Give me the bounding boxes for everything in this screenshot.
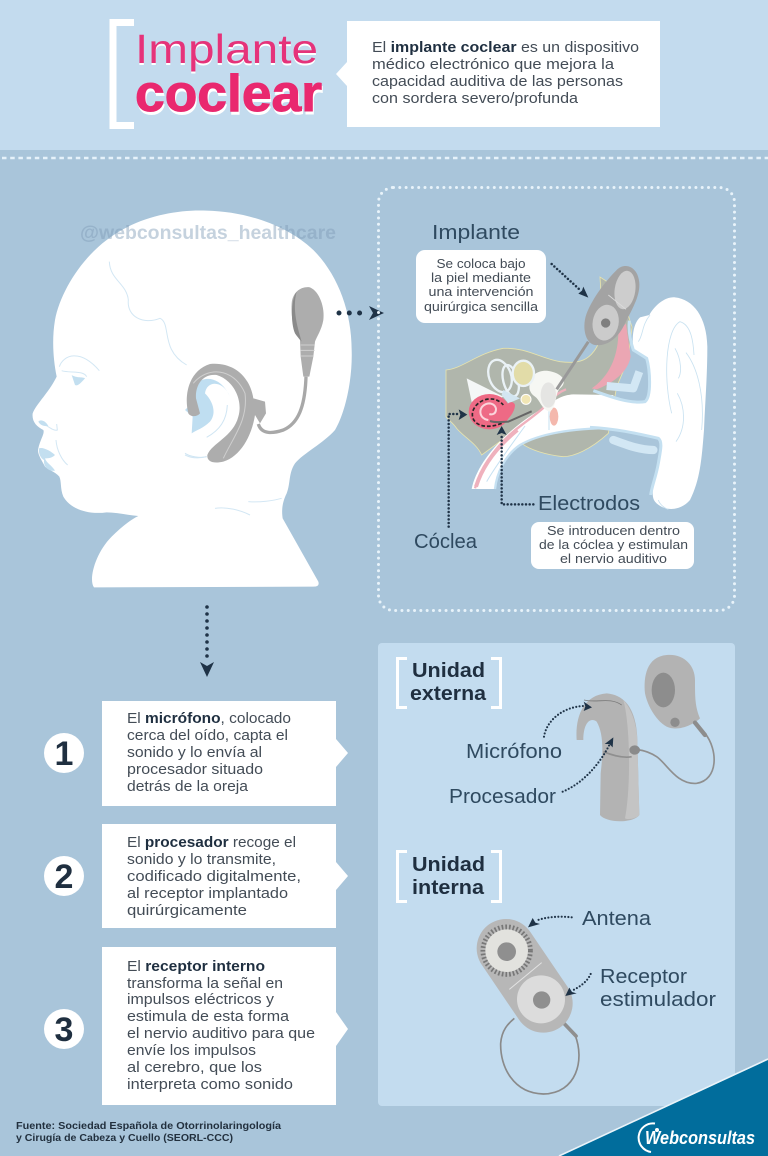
title: [113, 22, 322, 126]
step text 1: detrás de la oreja: [127, 778, 249, 795]
middle ear cloud: [529, 371, 564, 412]
step 2: [44, 824, 348, 928]
number badge 3: [44, 1009, 84, 1049]
cochlear fan: [467, 378, 503, 410]
step text 3: [102, 947, 348, 1105]
arrow: Procesador: [563, 737, 613, 792]
cable: [258, 377, 306, 433]
intro text box: médico electrónico que mejora la: [372, 56, 615, 73]
callout: implant placement: quirúrgica sencilla: [424, 300, 538, 314]
intro text box: capacidad auditiva de las personas: [372, 73, 623, 90]
label: Electrodos: Electrodos: [538, 493, 640, 515]
callout: electrodes: [531, 522, 694, 569]
implant stem: [557, 342, 588, 389]
eardrum shade: [550, 408, 558, 426]
callout: electrodes: Se introducen dentro: [547, 524, 680, 538]
step text 2: quirúrgicamente: [127, 902, 247, 919]
label: Receptor estimulador: Receptor: [600, 966, 687, 988]
arrow: Electrodos: [497, 426, 533, 504]
arrow: Antena: [528, 917, 572, 927]
step text 1: procesador situado: [127, 761, 263, 778]
intro text box: [336, 21, 660, 127]
intro text box: con sordera severo/profunda: [372, 90, 579, 107]
source note: y Cirugía de Cabeza y Cuello (SEORL-CCC): [16, 1132, 233, 1144]
step text 3: el nervio auditivo para que: [127, 1025, 315, 1042]
watermark: @webconsultas_healthcare: [80, 223, 336, 244]
brand corner: [559, 1059, 768, 1156]
coil: [645, 655, 700, 728]
implant body: [506, 948, 543, 1003]
arrow: head to implant detail: [339, 306, 384, 320]
step text 2: sonido y lo transmite,: [127, 851, 276, 868]
number badge 2: [44, 856, 84, 896]
panel: implant detail: [378, 188, 734, 610]
arrow: head down to steps: [200, 607, 214, 677]
connecting cable: [603, 733, 714, 783]
step text 3: estimula de esta forma: [127, 1008, 290, 1025]
illustration: baby head with implant: [33, 211, 352, 587]
outer ear: [557, 266, 707, 509]
label: Cóclea: Cóclea: [414, 531, 478, 553]
logo: Webconsultas: [645, 1128, 755, 1148]
middle and inner ear: [446, 277, 632, 489]
step text 1: [102, 701, 348, 806]
ear canal: [472, 394, 613, 489]
step text 3: al cerebro, que los: [127, 1059, 262, 1076]
step text 3: El receptor interno: [127, 958, 265, 975]
number badge 3: 3: [55, 1011, 73, 1049]
illustration: internal unit: [483, 927, 579, 1094]
heading: Unidad interna: interna: [412, 877, 485, 899]
antenna ring: [483, 927, 530, 974]
canal lining: [590, 321, 661, 495]
step text 2: al receptor implantado: [127, 885, 288, 902]
step 1: [44, 701, 348, 806]
source note: Fuente: Sociedad Española de Otorrinolaringología: [16, 1120, 281, 1132]
step text 1: sonido y lo envía al: [127, 744, 262, 761]
semicircular canals: [484, 357, 534, 398]
head silhouette: [33, 211, 352, 587]
ear: [185, 379, 230, 433]
coil: [292, 287, 324, 377]
arrow: Cóclea: [449, 409, 467, 527]
label: Receptor estimulador: [600, 966, 716, 1011]
auditory nerve: [475, 389, 566, 488]
callout: implant placement: una intervención: [428, 285, 534, 299]
callout: implant placement: la piel mediante: [431, 271, 531, 285]
number badge 2: 2: [55, 858, 73, 896]
callout: implant placement: [416, 250, 546, 323]
illustration: inner ear anatomy: [446, 266, 707, 509]
title bracket: [113, 22, 134, 126]
auricle folds: [638, 315, 702, 509]
number badge 1: [44, 733, 84, 773]
number badge 1: 1: [55, 735, 73, 773]
step text 1: cerca del oído, capta el: [127, 727, 288, 744]
processor: [187, 364, 266, 463]
panel: device units: [378, 643, 735, 1106]
step text 2: El procesador recoge el: [127, 834, 296, 851]
muscle: [592, 323, 631, 389]
callout: electrodes: el nervio auditivo: [560, 552, 667, 566]
heading: Unidad externa: [398, 658, 500, 708]
label: Antena: Antena: [582, 908, 652, 930]
heading: Unidad externa: Unidad: [412, 660, 485, 682]
title line: coclear: coclear: [135, 65, 322, 123]
step text 3: interpreta como sonido: [127, 1076, 293, 1093]
title line: Implante: Implante: [135, 26, 318, 72]
source note: [16, 1120, 281, 1144]
label: Procesador: Procesador: [449, 786, 556, 808]
step 3: [44, 947, 348, 1105]
heading: Unidad interna: [398, 852, 500, 902]
intro text box: El implante coclear es un dispositivo: [372, 39, 639, 56]
lead wire: [501, 1018, 579, 1094]
temporal bone: [446, 277, 632, 457]
callout: electrodes: de la cóclea y estimulan: [539, 538, 688, 552]
arrow: Receptor estimulador: [565, 974, 591, 996]
label: Receptor estimulador: estimulador: [600, 989, 716, 1011]
step text 2: [102, 824, 348, 928]
ear and implant processor: [185, 287, 324, 463]
step text 3: impulsos eléctricos y: [127, 991, 275, 1008]
receiver disc: [517, 975, 565, 1023]
arrow: Micrófono: [544, 702, 592, 737]
label: Micrófono: Micrófono: [466, 741, 562, 763]
processor: [576, 693, 639, 821]
illustration: external unit: [576, 655, 714, 821]
label: Implante: Implante: [432, 222, 520, 244]
logo: [639, 1123, 755, 1152]
step text 1: El micrófono, colocado: [127, 710, 291, 727]
cochlea: [469, 394, 510, 429]
step text 2: codificado digitalmente,: [127, 868, 301, 885]
arrow: callout to implant: [552, 264, 588, 298]
heading: Unidad interna: Unidad: [412, 854, 485, 876]
callout: implant placement: Se coloca bajo: [436, 257, 526, 271]
step text 3: transforma la señal en: [127, 975, 283, 992]
implant capsule: [584, 266, 639, 345]
heading: Unidad externa: externa: [410, 683, 487, 705]
electrode: [472, 399, 503, 426]
header band: [0, 0, 768, 158]
step text 3: envíe los impulsos: [127, 1042, 256, 1059]
